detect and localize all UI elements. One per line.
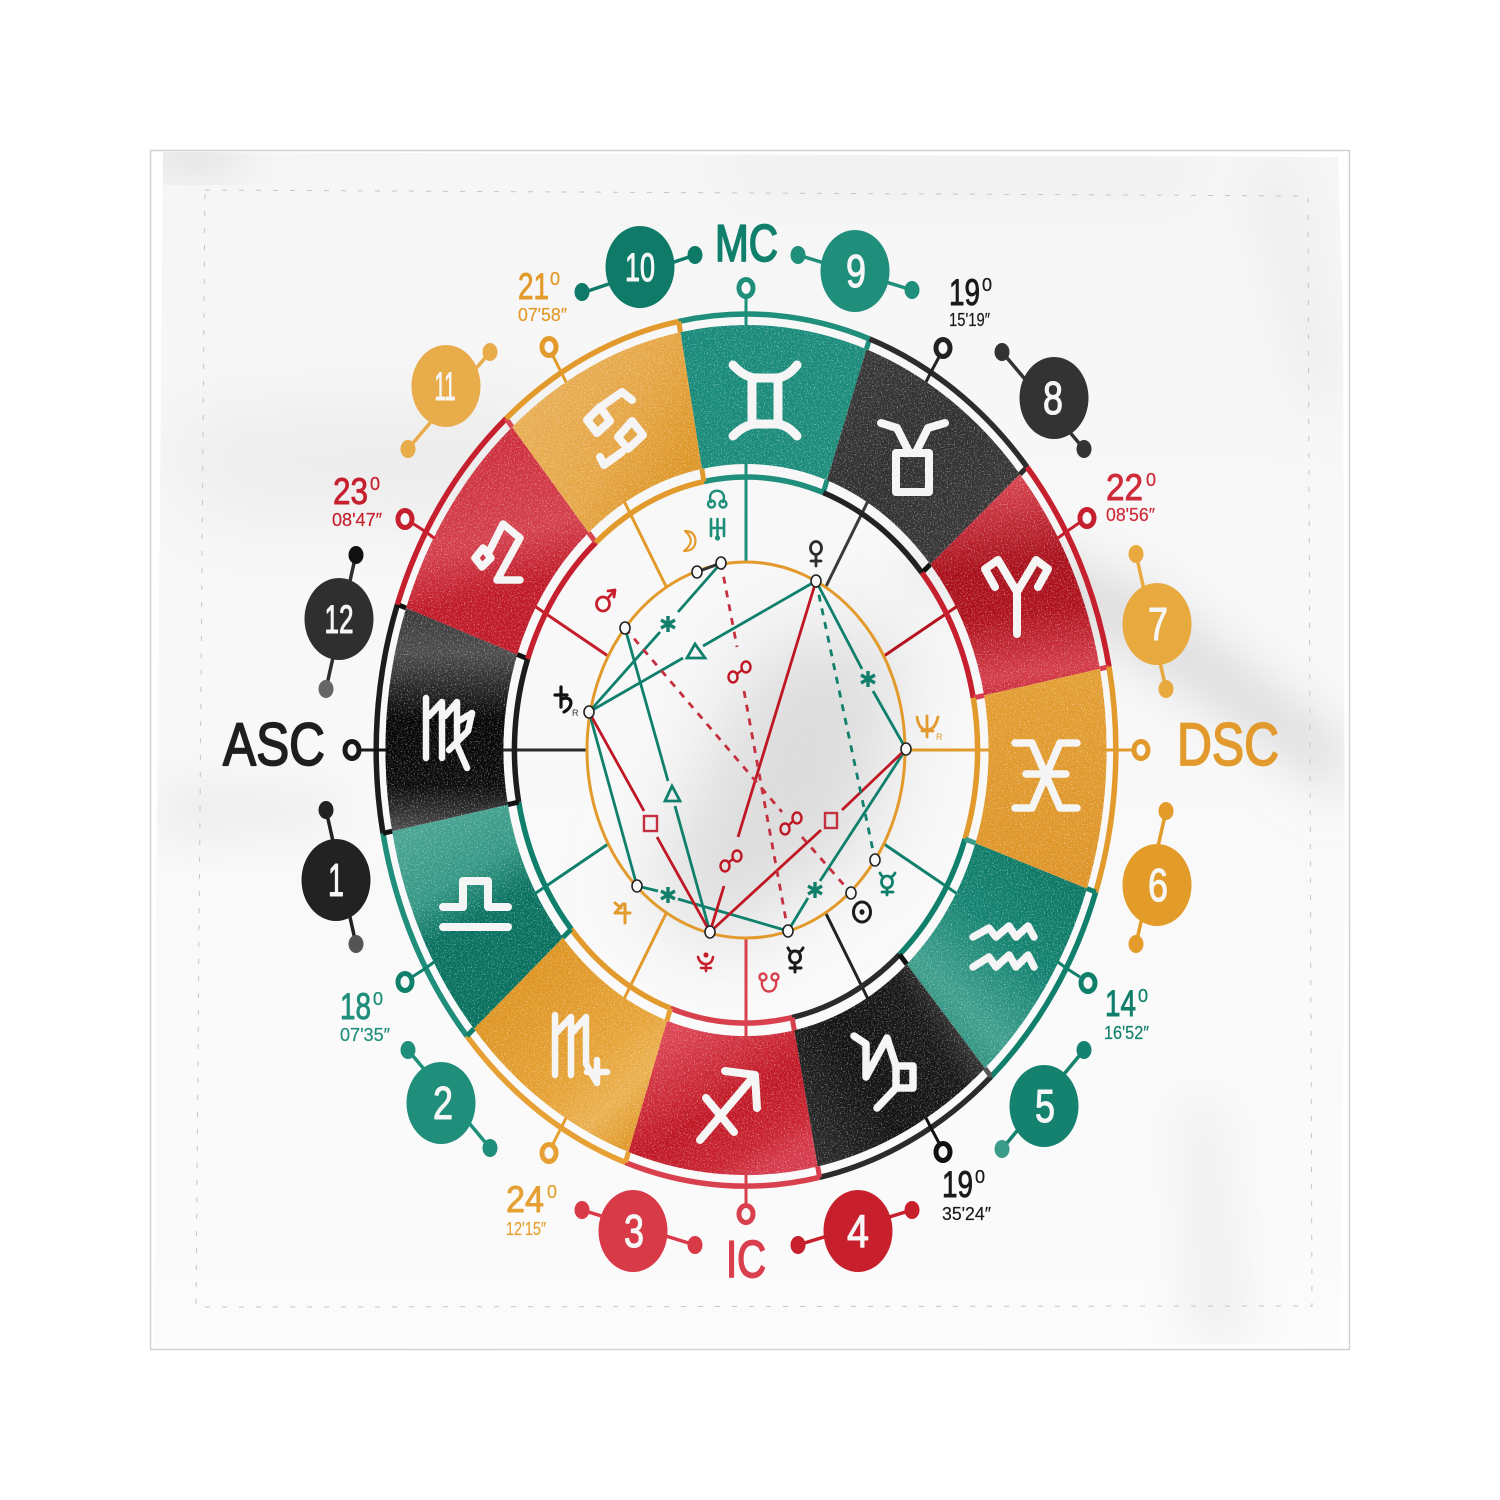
axis label: IC: IC — [726, 1231, 766, 1289]
inner aspect chart — [555, 491, 943, 992]
icon: Uranus — [711, 519, 724, 541]
badge 5 — [994, 1041, 1092, 1158]
axis label: DSC: DSC — [1177, 711, 1279, 778]
badge 1: 1 — [328, 854, 344, 906]
degree label 19 bottom: 19 — [942, 1164, 973, 1205]
degree label 21: 21 — [518, 266, 549, 307]
aspect symbols: squares — [644, 813, 837, 831]
badge 10 — [574, 226, 702, 308]
badge 5: 5 — [1035, 1080, 1055, 1132]
aspect lines: solid red — [589, 581, 906, 932]
icon: Mars — [596, 590, 615, 611]
aspect symbols: sextile stars — [661, 616, 875, 903]
sector: Scorpio — [467, 929, 670, 1162]
degree label 22: 08'56″ — [1106, 505, 1156, 525]
house ticks across the white gaps — [374, 313, 1118, 1187]
degree label 19 top: 19 — [949, 272, 980, 313]
icon: Pluto — [698, 952, 713, 971]
badge 6: 6 — [1148, 859, 1168, 911]
badge 11: 11 — [434, 365, 456, 409]
house cusp pins — [345, 280, 1148, 1222]
degree label 14: 16'52″ — [1104, 1023, 1150, 1043]
badge 10: 10 — [625, 246, 655, 290]
degree label 18 — [340, 986, 391, 1045]
badge 12: 12 — [324, 598, 354, 642]
badge 7 — [1122, 545, 1192, 698]
degree label 14: 0 — [1138, 986, 1148, 1006]
icon: south node — [760, 974, 778, 992]
degree label 19 bottom — [942, 1164, 992, 1224]
icon: Venus — [810, 542, 822, 566]
aspect lines: dashed — [625, 563, 875, 931]
degree label 23: 0 — [370, 474, 380, 494]
degree label 14 — [1104, 983, 1150, 1043]
degree label 21: 07'58″ — [518, 305, 568, 325]
sector: Virgo — [376, 604, 528, 833]
degree label 21: 0 — [550, 269, 560, 289]
degree label 19 top: 0 — [982, 275, 992, 295]
degree label 21 — [518, 266, 568, 325]
badge 4: 4 — [847, 1205, 869, 1257]
degree label 23: 23 — [333, 471, 368, 512]
icon: Moon — [684, 531, 696, 551]
degree label 24: 12'15″ — [506, 1219, 546, 1239]
icon: Neptune retrograde: R — [936, 732, 943, 742]
aspect lines: solid teal — [589, 563, 906, 932]
badge 12 — [304, 546, 374, 698]
degree label 22: 0 — [1146, 470, 1156, 490]
degree label 24: 0 — [547, 1182, 557, 1202]
degree labels — [332, 266, 1156, 1239]
aspect symbols: oppositions — [720, 662, 802, 872]
badge 9: 9 — [846, 245, 866, 297]
badge 1 — [302, 801, 370, 953]
degree label 22 — [1106, 467, 1156, 525]
icon: Mercury teal — [880, 873, 895, 895]
house number badges — [302, 226, 1192, 1272]
badge 7: 7 — [1148, 598, 1168, 650]
icon: north node — [708, 491, 726, 508]
degree label 23 — [332, 471, 383, 530]
degree label 19 top: 15'19″ — [949, 310, 991, 330]
inner spokes — [502, 462, 990, 1038]
axis label: MC: MC — [715, 215, 778, 273]
degree label 22: 22 — [1106, 467, 1143, 508]
degree label 18: 0 — [373, 989, 383, 1009]
badge 3: 3 — [624, 1205, 644, 1257]
badge 2 — [400, 1041, 498, 1157]
badge 3 — [574, 1190, 702, 1272]
sector: Aquarius — [900, 839, 1096, 1077]
badge 8 — [994, 343, 1092, 458]
icon: Neptune retrograde — [917, 716, 943, 742]
badge 8: 8 — [1043, 372, 1063, 424]
icon: Sun — [854, 902, 870, 922]
icon: Saturn retrograde — [555, 687, 579, 718]
fabric napkin background — [150, 150, 1350, 1350]
degree label 19 top — [949, 272, 992, 330]
degree label 18: 07'35″ — [340, 1025, 391, 1045]
degree label 24: 24 — [506, 1179, 544, 1220]
planet nodes — [584, 557, 911, 938]
badge 9 — [790, 230, 920, 312]
icon: Jupiter — [615, 903, 630, 923]
axis label: ASC: ASC — [223, 711, 325, 778]
aspect circle — [587, 562, 905, 938]
sector: Leo — [397, 419, 596, 659]
degree label 24 — [506, 1179, 557, 1239]
planet conjunction link — [697, 563, 721, 572]
panel: zodiac wheel — [374, 313, 1118, 1187]
degree label 18: 18 — [340, 986, 371, 1027]
icon: Saturn retrograde: R — [572, 708, 579, 718]
sector: Taurus — [823, 339, 1027, 573]
degree label 19 bottom: 35'24″ — [942, 1204, 992, 1224]
sector: Pisces — [965, 667, 1116, 892]
aspect symbols: trines — [665, 644, 705, 801]
sector: Sagittarius — [626, 1008, 820, 1186]
sector: Gemini — [679, 314, 870, 493]
sector: Libra — [383, 802, 571, 1036]
badge 6 — [1122, 802, 1192, 953]
sector: Aries — [922, 467, 1109, 698]
degree label 19 bottom: 0 — [975, 1167, 985, 1187]
badge 11 — [400, 343, 498, 458]
degree label 14: 14 — [1105, 983, 1136, 1024]
degree label 23: 08'47″ — [332, 510, 383, 530]
sector: Capricorn — [792, 954, 991, 1177]
sector: Cancer — [506, 321, 704, 542]
badge 4 — [790, 1190, 920, 1272]
badge 2: 2 — [433, 1077, 453, 1129]
icon: Mercury — [788, 948, 803, 972]
